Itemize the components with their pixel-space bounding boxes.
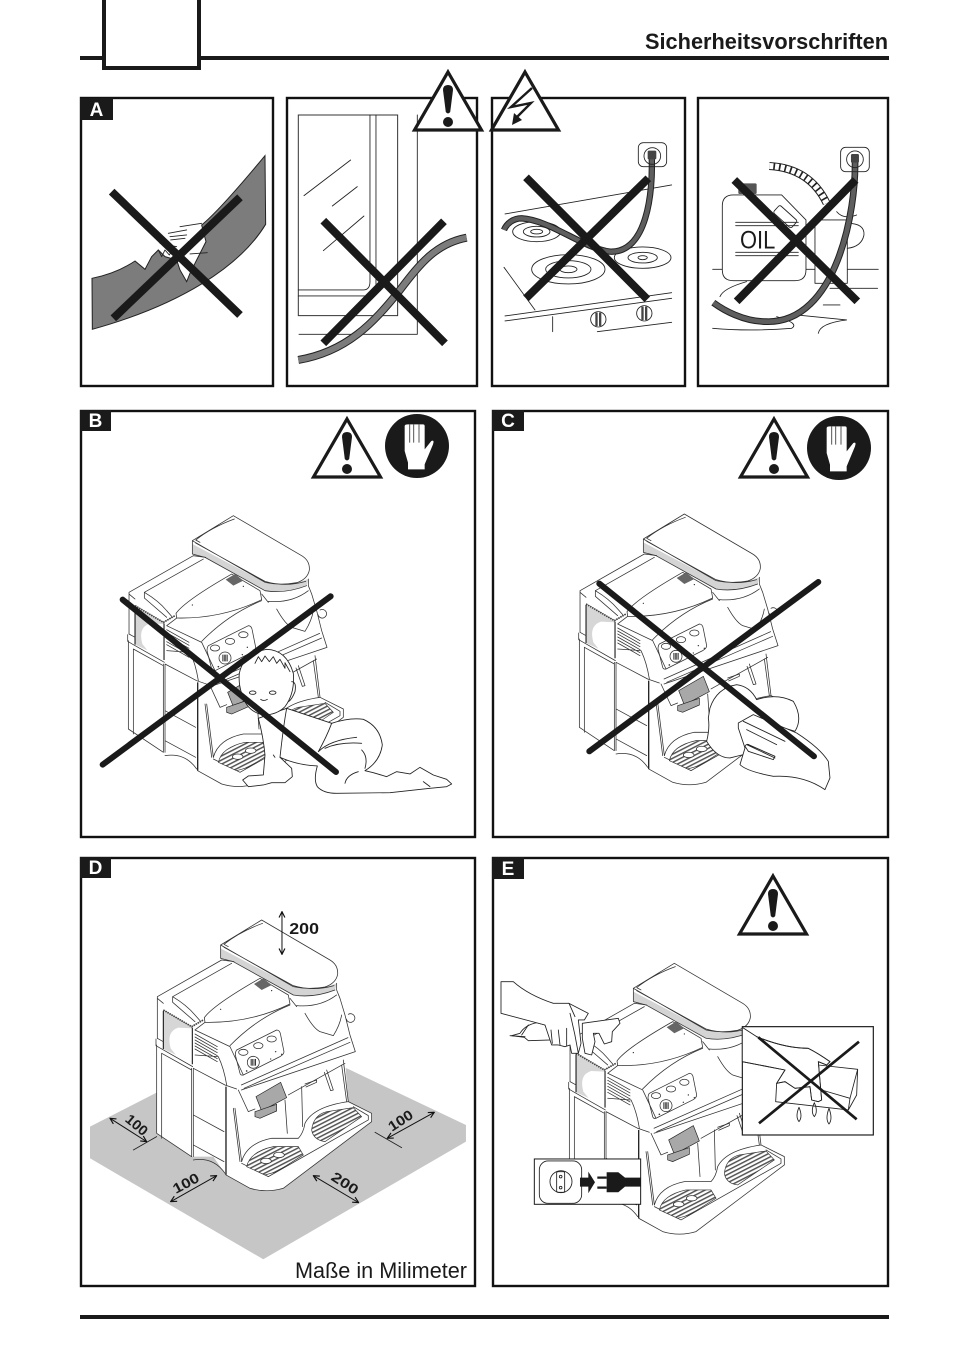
header rule [80, 56, 889, 60]
panel: cable on hob [492, 98, 685, 386]
caption: Maße in Milimeter [295, 1258, 467, 1283]
coffee machine [128, 516, 343, 787]
panel: cable in oil [698, 98, 888, 386]
clearance arrow: front left 100 [170, 1169, 217, 1202]
clearance arrow: rear left 100: 100 [122, 1111, 152, 1139]
illustration: door and cable [298, 115, 467, 360]
clearance arrow: front right 200: 200 [328, 1168, 362, 1198]
label C [492, 410, 524, 432]
hand wiping with cloth [501, 982, 620, 1055]
warning triangle [314, 419, 380, 477]
illustration: oil can, hose, cable [713, 147, 878, 333]
panel: cable near hot door [287, 98, 477, 386]
clearance arrow: front left 100: 100 [170, 1169, 202, 1197]
label B: B [89, 411, 102, 432]
illustration: torn grey cable [92, 156, 266, 329]
stop hand icon [385, 414, 449, 478]
prohibition cross [103, 596, 336, 772]
panel: E cleaning [492, 857, 888, 1286]
page number tab [104, 0, 199, 68]
warning triangle: general [414, 72, 482, 130]
label D [80, 857, 111, 879]
warning triangle [740, 876, 806, 934]
panel: A damaged cable [80, 98, 273, 386]
prohibition cross [589, 582, 818, 756]
inset: do not wring wet cloth [742, 1027, 873, 1135]
label E: E [502, 859, 514, 880]
clearance arrow: top 200: 200 [289, 921, 319, 938]
floor area [90, 1068, 466, 1259]
label D: D [89, 858, 102, 879]
clearance arrow: rear right 100: 100 [385, 1106, 416, 1134]
label A [80, 98, 113, 121]
oil label: OIL [740, 226, 775, 254]
panel: B keep away from children [80, 410, 475, 837]
stop hand icon [807, 416, 871, 480]
warning triangle: electric shock [492, 72, 558, 130]
clearance arrow: top 200 [282, 912, 319, 954]
hand with cloth [707, 685, 830, 790]
label B [80, 410, 111, 432]
title: Sicherheitsvorschriften [645, 29, 888, 54]
coffee machine [156, 920, 372, 1191]
label C: C [501, 411, 515, 432]
panel: C do not touch with wet hands [492, 410, 888, 837]
footer rule [80, 1315, 889, 1319]
illustration: hob and cable [504, 143, 672, 332]
warning triangle [740, 419, 808, 477]
coffee machine [579, 514, 794, 785]
label E [492, 857, 524, 880]
inset: unplug [534, 1159, 641, 1204]
clearance arrow: rear right 100 [375, 1106, 434, 1148]
baby [239, 649, 452, 793]
clearance arrow: rear left 100 [110, 1111, 157, 1150]
label A: A [90, 100, 104, 121]
panel: D clearances [80, 857, 475, 1286]
coffee machine [569, 963, 784, 1235]
clearance arrow: front right 200 [313, 1168, 362, 1203]
